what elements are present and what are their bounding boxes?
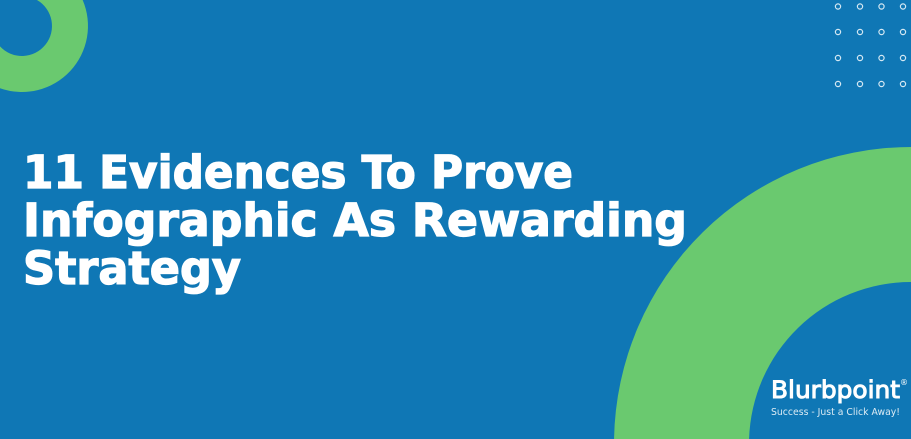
ring: bottom-right green — [614, 147, 911, 439]
title: 11 Evidences To Prove — [23, 146, 573, 199]
title: Infographic As Rewarding — [23, 194, 687, 247]
title: Strategy — [23, 242, 241, 295]
logo: Blurbpoint: Blurbpoint — [771, 376, 900, 404]
ring: top-left green — [0, 0, 88, 92]
logo: Blurbpoint: Success - Just a Click Away! — [771, 407, 900, 418]
logo: Blurbpoint: ® — [900, 378, 908, 387]
logo: Blurbpoint — [771, 376, 908, 418]
title — [23, 146, 687, 295]
dot grid — [835, 4, 906, 87]
